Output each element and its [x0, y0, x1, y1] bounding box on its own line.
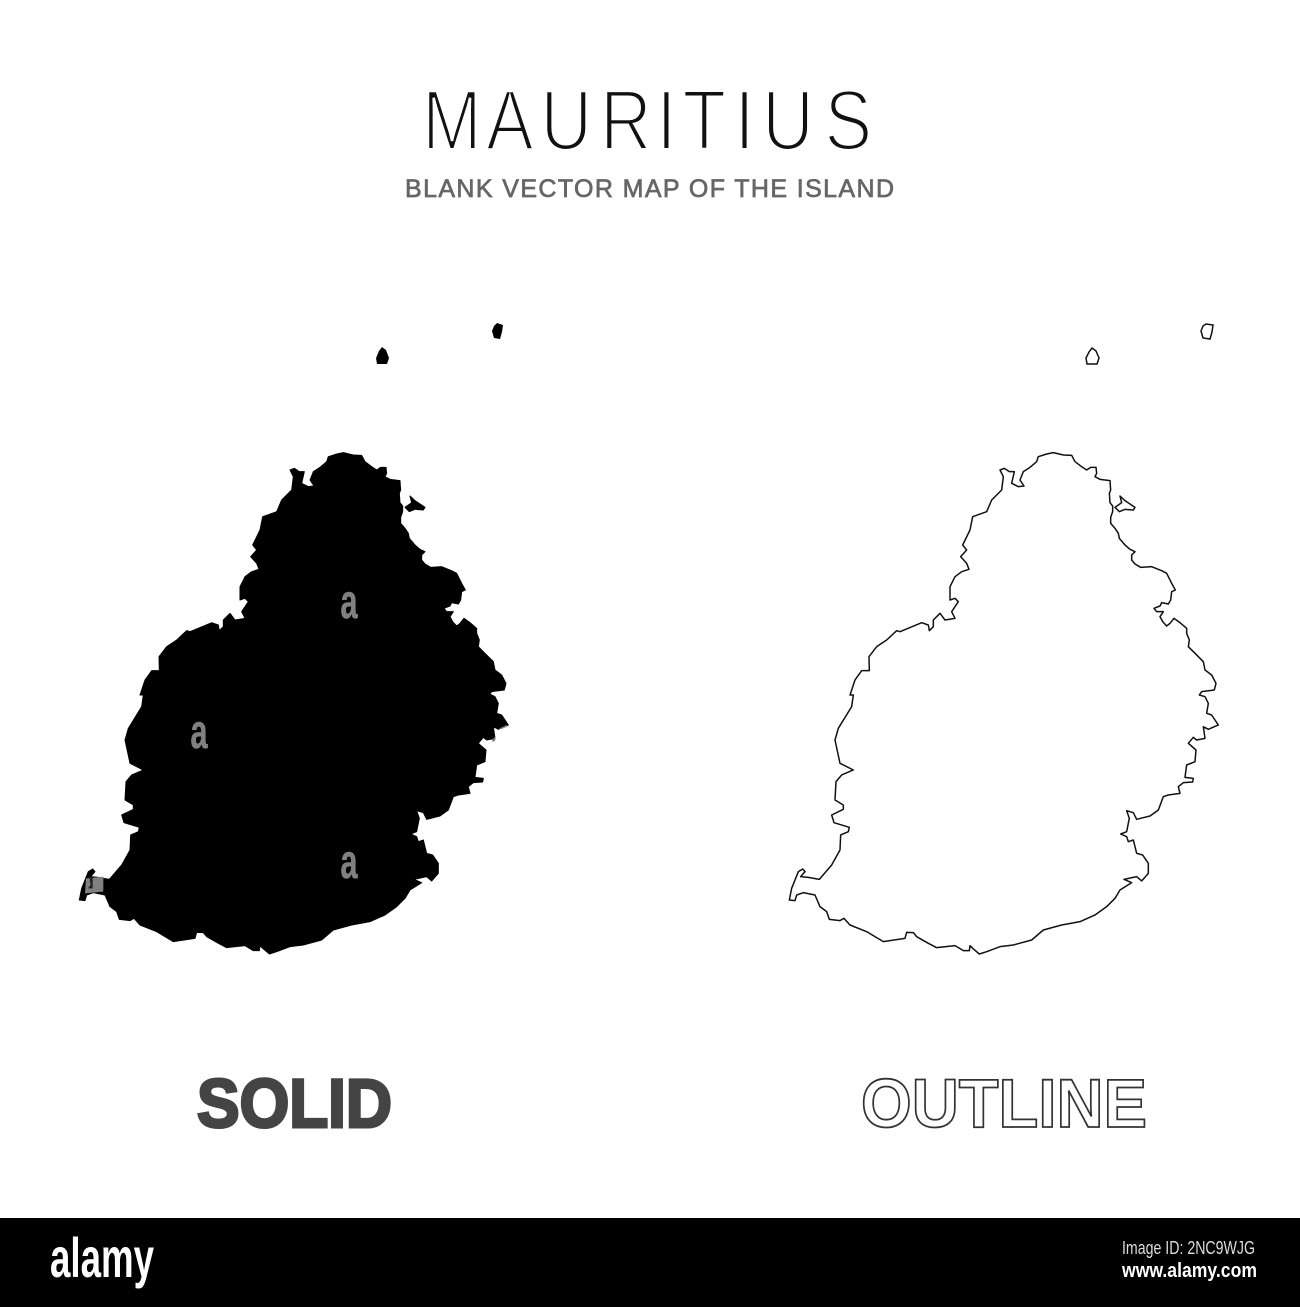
- outline main island: [789, 453, 1218, 954]
- solid main island: [79, 453, 508, 954]
- solid islet: north-east: [492, 323, 503, 339]
- watermark letter: a: [340, 576, 358, 629]
- solid islet: north-west: [376, 347, 389, 364]
- outline map of Mauritius: [789, 324, 1218, 954]
- title: MAURITIUS: [422, 73, 872, 168]
- watermark letter: a: [190, 706, 208, 759]
- outline islet: north-east: [1201, 324, 1213, 339]
- website: www.alamy.com: [1121, 1260, 1257, 1282]
- subtitle: BLANK VECTOR MAP OF THE ISLAND: [405, 175, 894, 203]
- footer logo: alamy: [50, 1226, 154, 1289]
- outline islet: north-west: [1086, 348, 1099, 364]
- footer band: [0, 1218, 1300, 1307]
- solid map of Mauritius: [79, 323, 508, 954]
- label: solid: SOLID: [197, 1065, 392, 1142]
- image id: Image ID: 2NC9WJG: [1122, 1238, 1255, 1258]
- watermark letter: a: [340, 836, 358, 889]
- label: outline: OUTLINE: [861, 1065, 1147, 1142]
